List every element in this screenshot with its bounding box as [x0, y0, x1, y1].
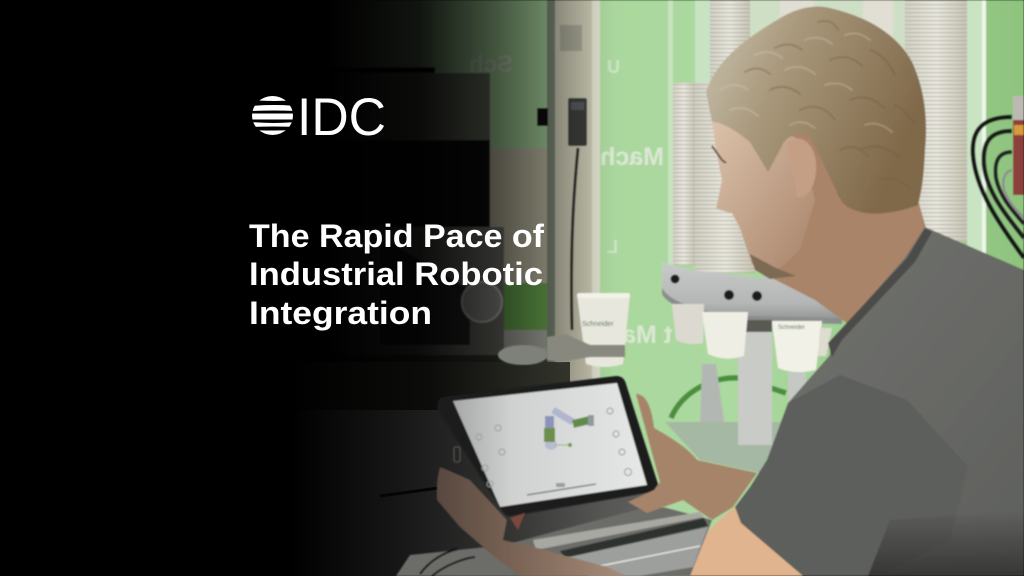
fingertip below tablet — [510, 513, 525, 530]
on-screen icons — [476, 408, 632, 487]
lower rail — [565, 527, 708, 576]
dark band under the flange — [290, 362, 570, 410]
left hand holding the tablet — [437, 467, 627, 576]
dim flange under the robot wrist — [498, 345, 548, 365]
robot arm on screen — [544, 410, 594, 450]
shirt sleeve — [735, 375, 968, 576]
man: eyebrow and eye — [712, 146, 726, 163]
disk on machine — [462, 282, 502, 322]
logo wordmark: IDC — [297, 88, 386, 147]
mirrored wall lettering — [600, 57, 672, 349]
title: The Rapid Pace of — [249, 218, 544, 254]
dark rail groove — [560, 518, 708, 558]
title: Integration — [249, 295, 432, 331]
white support column and cups under the base — [672, 304, 832, 445]
mirrored wall lettering: t Ma — [621, 321, 672, 349]
photo: technician operating robot from a tablet — [300, 0, 1024, 576]
lower left dim machine area — [290, 395, 660, 576]
mirrored wall lettering: U — [607, 57, 620, 77]
man: t-shirt — [735, 227, 1024, 576]
title — [249, 218, 544, 331]
glass tubes with stacked paper cups — [668, 0, 986, 273]
logo globe mark — [252, 96, 293, 135]
man: beard — [750, 254, 796, 279]
robot gripper band — [547, 334, 625, 362]
man: face — [712, 120, 815, 277]
equipment column with switch box — [537, 0, 600, 400]
green cable — [671, 378, 786, 418]
man: bare forearm at the bottom — [680, 507, 803, 576]
pale table surface — [665, 422, 782, 475]
on-screen slider — [527, 484, 596, 495]
hair texture strokes — [720, 21, 915, 188]
white support column and cups under the base: Schneider — [778, 325, 805, 331]
shirt collar — [828, 228, 932, 357]
tablet home button — [454, 447, 460, 462]
machinery on the left of the photo — [300, 67, 560, 425]
cone bracket — [700, 364, 724, 426]
hero infographic canvas — [249, 0, 1024, 576]
paper cup in robot gripper: Schneider — [582, 321, 614, 328]
black line across machine — [380, 487, 446, 496]
tablet body — [438, 376, 658, 516]
IDC logo — [252, 96, 384, 136]
shadow under the sleeve — [868, 510, 1024, 576]
paper cup in robot gripper — [577, 293, 630, 367]
tablet with robot control app — [437, 376, 757, 576]
mirrored brand lettering on left wall: Sch — [469, 51, 513, 78]
man: ear — [787, 138, 816, 197]
black cables and red sensor block — [973, 96, 1024, 258]
loose black cables — [420, 549, 458, 574]
title: Industrial Robotic — [249, 256, 543, 292]
right hand gripping the tablet — [628, 394, 757, 520]
mirrored wall lettering: L — [607, 237, 618, 257]
upper rail — [533, 512, 704, 550]
man: hair — [706, 6, 926, 214]
photo background: green wall — [300, 0, 1024, 576]
silver cup dispenser base — [662, 262, 842, 324]
mirrored wall lettering: Mach — [600, 143, 664, 171]
man: neck — [770, 130, 926, 324]
tablet screen — [453, 383, 647, 507]
area beneath the tablet and rails — [396, 505, 712, 576]
